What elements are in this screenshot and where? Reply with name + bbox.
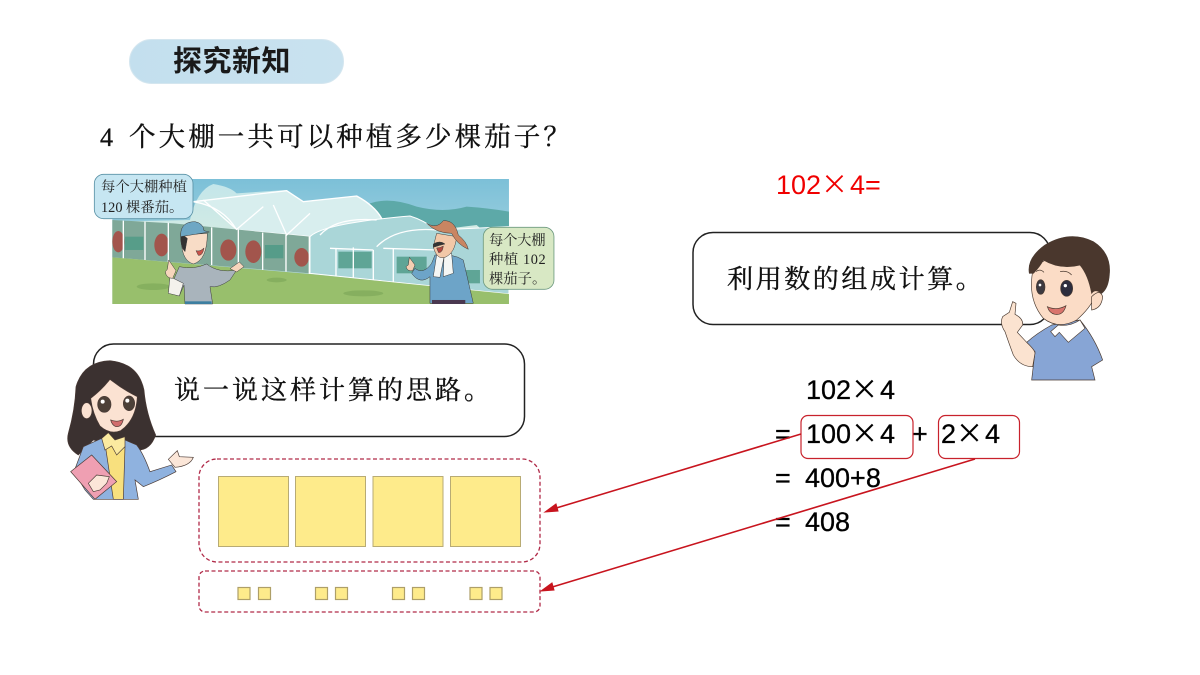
girl collar (102, 433, 125, 455)
calculation steps: 2 (941, 419, 956, 449)
question text: 4 (100, 123, 113, 152)
boy shirt (1027, 320, 1103, 380)
arrow: 2×4 to eight ones (541, 459, 975, 591)
speech bubble: eggplants (483, 227, 554, 289)
calculation steps: × (851, 368, 878, 407)
expression: 102×4= in red: 4= (850, 170, 881, 200)
farmer in grey sweater (165, 222, 244, 304)
calculation steps: = (775, 507, 791, 537)
girl jacket (74, 438, 176, 499)
boy face (1031, 253, 1102, 325)
four large yellow squares (218, 476, 520, 546)
character: girl (68, 361, 193, 499)
speech bubble: eggplants: 棵茄子。 (489, 269, 546, 287)
question text: 个大棚一共可以种植多少棵茄子？ (129, 122, 573, 152)
greenhouses (112, 184, 509, 294)
calculation steps: = (775, 463, 791, 493)
speech bubble: tomatoes (94, 174, 193, 219)
calculation steps (775, 368, 1000, 537)
highlight box: 2×4 (938, 416, 1020, 458)
boy arm and hand (1001, 302, 1035, 367)
farmer in blue shirt and straw hat (406, 221, 473, 304)
speech bubble: eggplants: 种植 102 (489, 250, 546, 268)
speech bubble: 说一说这样计算的思路: 说一说这样计算的思路。 (174, 376, 493, 405)
eight small yellow squares (238, 588, 502, 600)
calculation steps: + (912, 419, 928, 449)
calculation steps: × (956, 412, 983, 451)
character: boy (1001, 237, 1110, 380)
boy collar (1051, 320, 1085, 342)
girl hair back (68, 361, 156, 455)
girl mouth (111, 419, 123, 427)
girl face (91, 379, 137, 432)
sky and mountains (112, 179, 509, 304)
calculation steps: 102 (806, 375, 851, 405)
speech bubble: 说一说这样计算的思路 (94, 344, 524, 436)
illustration: greenhouse scene with two farmers (94, 174, 554, 304)
arrow: 100×4 to four hundreds (545, 434, 801, 512)
girl open hand (168, 451, 193, 467)
dashed group: four hundreds (199, 459, 540, 562)
girl hand on book (88, 475, 109, 492)
calculation steps: 408 (805, 507, 850, 537)
speech bubble: tomatoes: 每个大棚种植 (101, 178, 187, 196)
boy hair (1029, 237, 1110, 293)
heading: 探究新知: 探究新知 (173, 45, 291, 78)
speech bubble: 利用数的组成计算: 利用数的组成计算。 (727, 265, 984, 294)
girl eyes (98, 396, 135, 412)
girl ear (81, 403, 92, 419)
calculation steps: 4 (880, 375, 895, 405)
dashed group: eight ones (199, 571, 540, 612)
calculation steps: 100 (806, 419, 851, 449)
calculation steps: × (851, 412, 878, 451)
speech bubble: eggplants: 每个大棚 (489, 232, 546, 249)
calculation steps: 4 (880, 419, 895, 449)
boy mouth (1047, 306, 1066, 314)
heading: 探究新知 (130, 40, 344, 84)
speech bubble: tomatoes: 120 棵番茄。 (101, 198, 183, 216)
expression: 102×4= in red: 102 (776, 170, 821, 200)
highlight box: 100×4 (801, 416, 913, 458)
expression: 102×4= in red: × (821, 163, 848, 202)
grass (112, 257, 509, 304)
calculation steps: = (775, 419, 791, 449)
boy ear (1092, 292, 1103, 310)
girl shirt (105, 443, 125, 499)
girl pink book (71, 455, 117, 499)
boy eyes (1036, 270, 1073, 296)
speech bubble: 利用数的组成计算 (693, 232, 1050, 324)
calculation steps: 4 (985, 419, 1000, 449)
calculation steps: 400+8 (805, 463, 881, 493)
